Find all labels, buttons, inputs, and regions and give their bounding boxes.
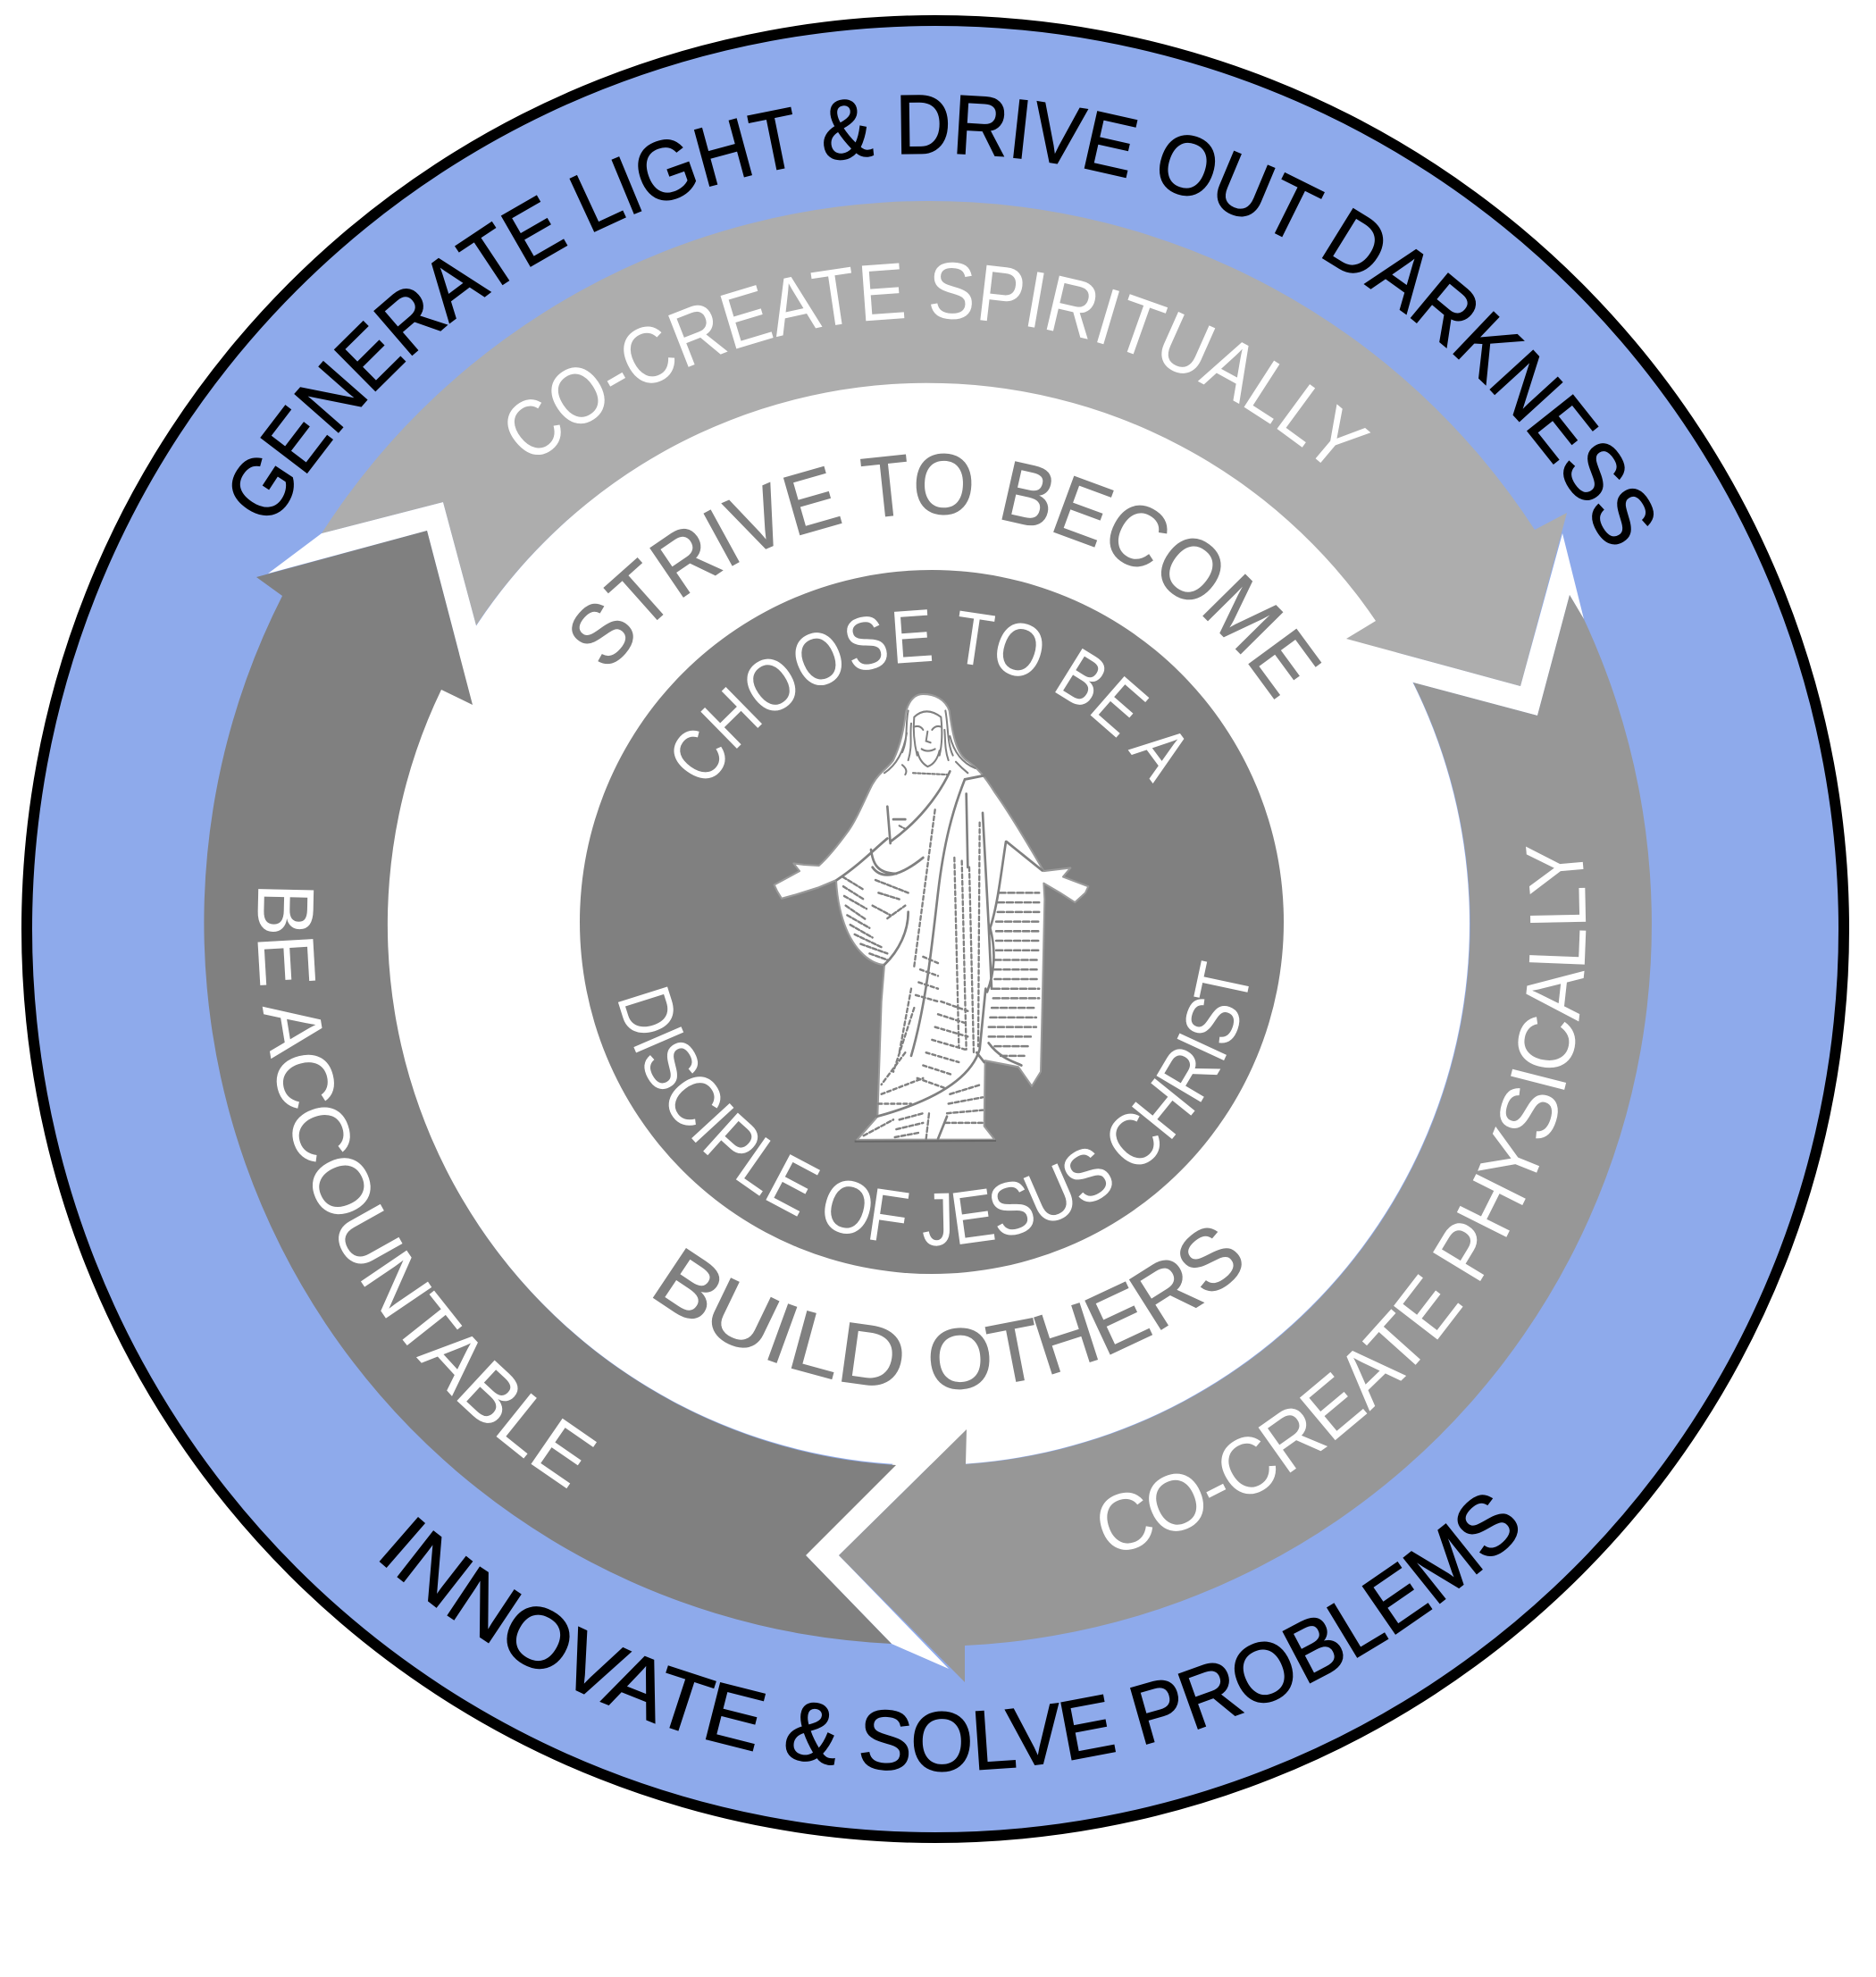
- text: choose to be a: CHOOSE TO BE A: [674, 609, 1185, 783]
- hatching left drape: [842, 877, 909, 960]
- arrow text: co-create spiritually: CO-CREATE SPIRITUALLY: [507, 263, 1370, 463]
- hatching lower robe and feet: [864, 1085, 984, 1139]
- hatching right drape: [989, 892, 1039, 1056]
- text: build others: OTHERS: [931, 1227, 1242, 1390]
- arrow text: be accountable: BE ACCOUNTABLE: [257, 889, 597, 1488]
- text: build others: BUILD: [652, 1248, 902, 1386]
- text: strive to become: STRIVE TO BECOME: [572, 454, 1322, 699]
- hair: [884, 711, 976, 775]
- hatching centre robe: [878, 809, 980, 1103]
- arrow: co-create spiritually: [322, 201, 1567, 686]
- arrow: co-create physically: [839, 595, 1652, 1682]
- ring text: generate light: GENERATE LIGHT & DRIVE OUT DARKNESS: [232, 95, 1654, 545]
- white gaps between arrows: [268, 502, 1584, 1669]
- ring text: innovate: & SOLVE PROBLEMS: [786, 1495, 1519, 1772]
- face: [914, 711, 942, 767]
- inner white disc: [387, 382, 1470, 1465]
- text: disciple of jesus christ: DISCIPLE OF JESUS CHRIST: [618, 960, 1249, 1246]
- ring text: innovate: [379, 1495, 1519, 1772]
- arrow text: co-create physically: CO-CREATE PHYSICALLY: [1100, 847, 1587, 1550]
- sash and folds: [837, 771, 1043, 1139]
- center circle: [580, 570, 1284, 1274]
- text: build others: [652, 1227, 1242, 1390]
- ring text: innovate: INNOVATE: [379, 1517, 766, 1751]
- arrow: be accountable: [204, 531, 896, 1644]
- icon: christ statue: [775, 694, 1088, 1142]
